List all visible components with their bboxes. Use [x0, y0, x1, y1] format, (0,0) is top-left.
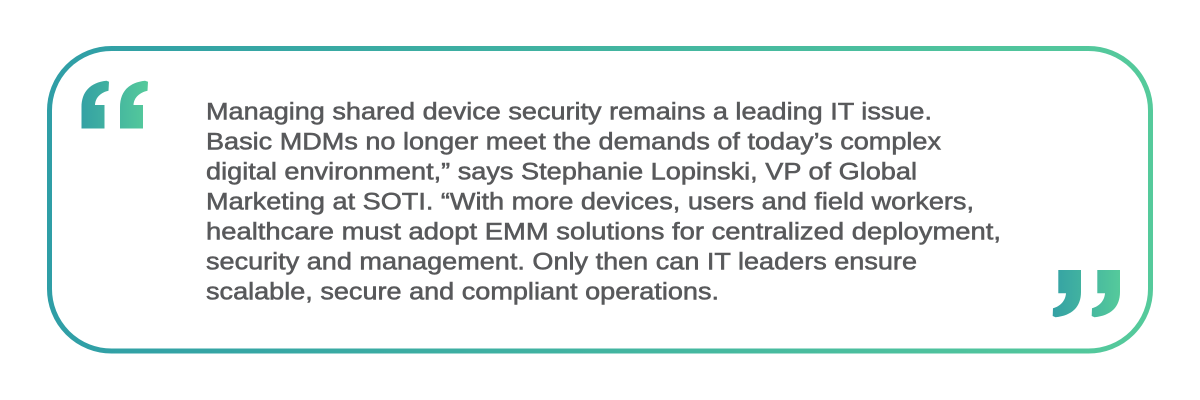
quote text: Managing shared device security remains a leading IT issue.: [206, 98, 932, 126]
quote text: digital environment,” says Stephanie Lopinski, VP of Global: [206, 158, 917, 186]
quote text: scalable, secure and compliant operations.: [206, 278, 719, 306]
quote text: Basic MDMs no longer meet the demands of today’s complex: [206, 128, 941, 156]
icon: opening quotation mark: [82, 81, 148, 128]
quote text: security and management. Only then can IT leaders ensure: [206, 248, 917, 276]
icon: closing quotation mark: [1053, 270, 1120, 317]
quote text: Marketing at SOTI. “With more devices, users and field workers,: [206, 188, 974, 216]
quote text: [206, 98, 1001, 306]
rounded gradient quote frame: [50, 48, 1150, 351]
quote text: healthcare must adopt EMM solutions for centralized deployment,: [206, 218, 1001, 246]
